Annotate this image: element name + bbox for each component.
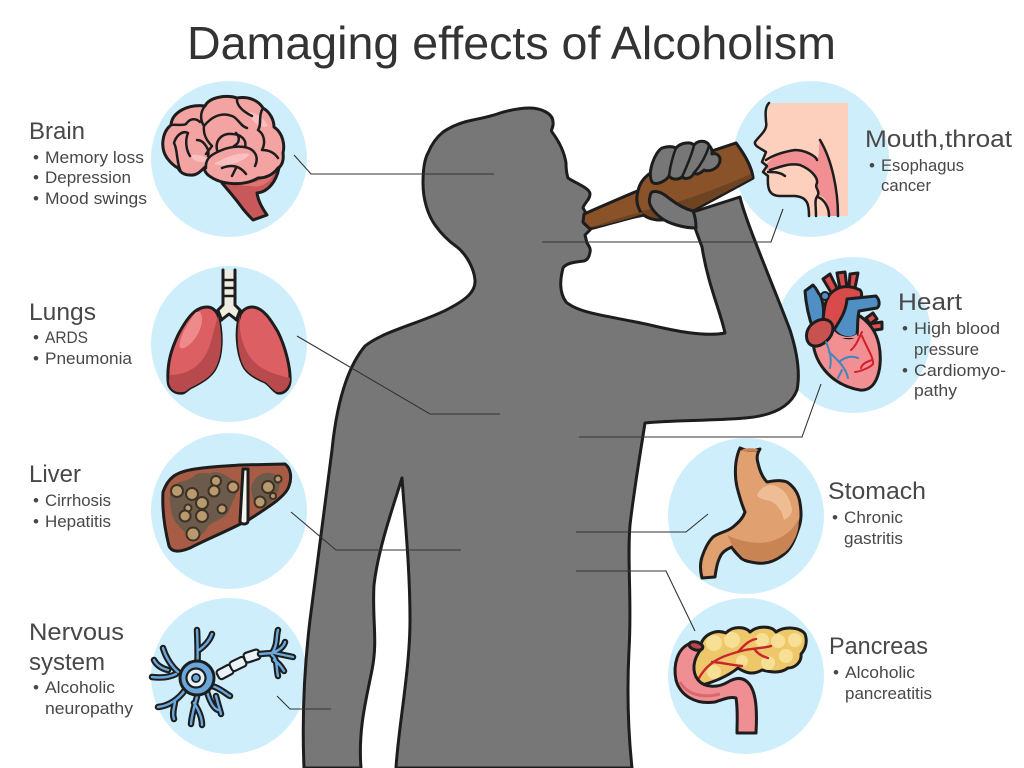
text: mouth, throat: Esophagus	[881, 156, 964, 175]
bottle neck at mouth	[583, 190, 646, 229]
text: brain: •	[33, 189, 39, 208]
text: brain: Brain	[29, 118, 85, 145]
text: stomach: gastritis	[844, 529, 903, 548]
text: liver: Liver	[29, 461, 81, 488]
text: brain: •	[33, 168, 39, 187]
text: heart: •	[902, 319, 908, 338]
text: pancreas	[829, 633, 932, 703]
icon: lungs	[168, 270, 290, 393]
text: lungs	[29, 299, 133, 368]
text: heart: High blood	[914, 319, 1000, 338]
text: mouth, throat	[865, 126, 1012, 195]
icon: neuron	[152, 630, 293, 725]
silhouette of man drinking	[303, 108, 798, 768]
text: mouth, throat: Mouth,throat	[865, 126, 1012, 153]
text: nervous system: Nervous	[29, 619, 124, 646]
text: nervous system: neuropathy	[45, 699, 134, 718]
text: lungs: ARDS	[45, 328, 88, 347]
text: heart: pressure	[914, 340, 979, 359]
text: heart: pathy	[914, 381, 958, 400]
text: pancreas: pancreatitis	[845, 684, 932, 703]
icon: stomach	[700, 448, 801, 578]
text: lungs: Pneumonia	[45, 349, 133, 368]
bottle body over arm	[637, 143, 753, 220]
text: liver	[29, 461, 111, 531]
text: mouth, throat: cancer	[881, 176, 931, 195]
icon: pancreas	[675, 627, 806, 733]
text: heart: •	[902, 361, 908, 380]
text: liver: Cirrhosis	[45, 491, 111, 510]
text: lungs: •	[33, 328, 39, 347]
text: heart	[898, 289, 1006, 400]
text: nervous system: •	[33, 678, 39, 697]
icon: heart	[805, 272, 882, 390]
text: heart: Cardiomyo-	[914, 361, 1006, 380]
text: pancreas: •	[833, 663, 839, 682]
text: pancreas: Pancreas	[829, 633, 928, 660]
text: lungs: •	[33, 349, 39, 368]
text: nervous system: Alcoholic	[45, 678, 116, 697]
text: stomach	[828, 478, 926, 548]
text: stomach: •	[832, 508, 838, 527]
leader lines	[277, 155, 821, 709]
text: liver: •	[33, 512, 39, 531]
text: brain: Mood swings	[45, 189, 147, 208]
bottle	[586, 143, 753, 229]
text: nervous system: system	[29, 649, 105, 676]
hand gripping bottle	[649, 141, 720, 228]
title: Damaging effects of Alcoholism	[187, 17, 836, 69]
icon: mouth and throat	[755, 103, 848, 216]
text: brain: •	[33, 148, 39, 167]
text: brain: Memory loss	[45, 148, 144, 167]
text: nervous system	[29, 619, 134, 718]
background circles	[151, 81, 931, 754]
text: brain: Depression	[45, 168, 131, 187]
text: mouth, throat: •	[869, 156, 875, 175]
icon: brain	[163, 97, 284, 220]
text: heart: Heart	[898, 289, 962, 316]
bottle shading	[590, 174, 752, 228]
text: lungs: Lungs	[29, 299, 96, 326]
text: pancreas: Alcoholic	[845, 663, 916, 682]
icon: liver	[163, 464, 291, 551]
text: stomach: Chronic	[844, 508, 903, 527]
text: stomach: Stomach	[828, 478, 926, 505]
text: liver: Hepatitis	[45, 512, 111, 531]
text: brain	[29, 118, 147, 208]
text: liver: •	[33, 491, 39, 510]
